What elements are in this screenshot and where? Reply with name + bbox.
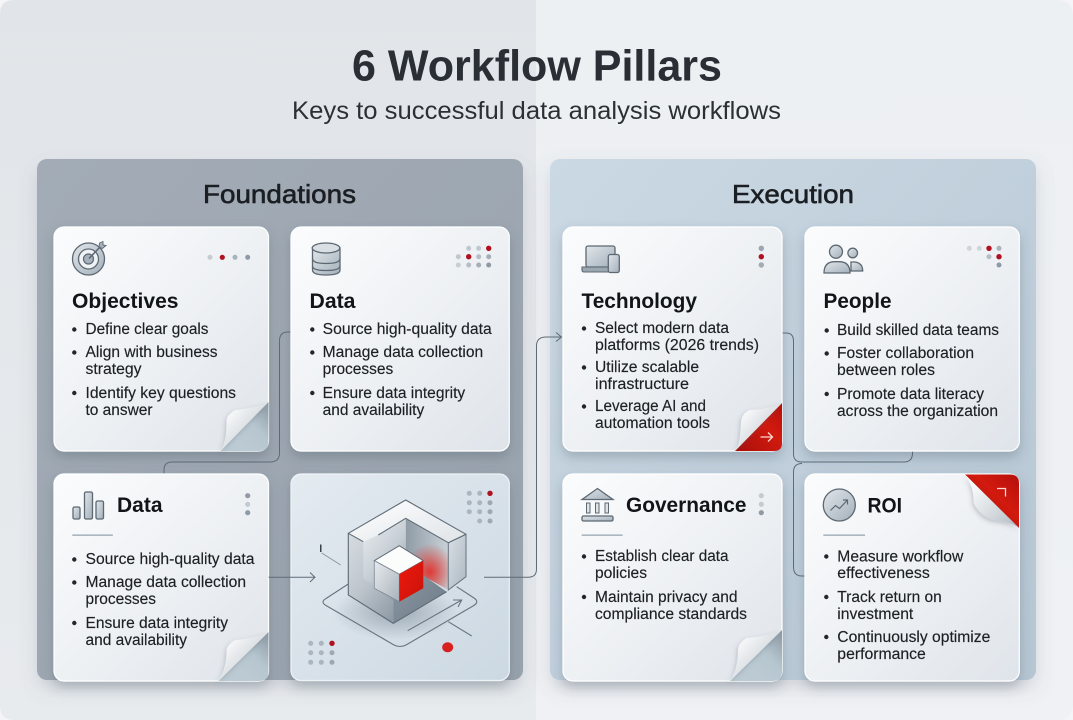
bullet list: Track return on [837, 589, 942, 606]
card: ROI [805, 474, 1019, 681]
dots decoration [456, 246, 491, 268]
bullet list: effectiveness [837, 565, 930, 582]
bullet list [824, 548, 990, 663]
red page curl with corner mark [965, 474, 1019, 528]
card: 3D cube illustration [291, 474, 509, 680]
icon: laptop and phone [582, 246, 619, 272]
bullet list: Ensure data integrity [86, 615, 228, 632]
heading: Objectives: Objectives [72, 290, 178, 313]
bullet list: compliance standards [595, 606, 747, 623]
bullet list: Source high-quality data [86, 551, 255, 568]
icon: institution [582, 488, 613, 521]
heading: Execution: Execution [732, 179, 854, 209]
icon: database [312, 243, 340, 275]
card: Data [291, 227, 509, 451]
bullet list [824, 322, 999, 420]
bullet list: Promote data literacy [837, 386, 984, 403]
card: Technology [563, 227, 782, 451]
bullet list: Source high-quality data [323, 321, 492, 338]
dots decoration [245, 493, 250, 515]
bullet list: Identify key questions [86, 385, 236, 402]
heading: People: People [824, 290, 892, 313]
bullet list: Manage data collection [323, 344, 483, 361]
bullet list [310, 321, 492, 419]
bullet list: performance [837, 646, 926, 663]
heading: Technology: Technology [582, 290, 697, 313]
bullet list: processes [86, 591, 156, 608]
heading: Data: Data [310, 290, 356, 313]
bullet list: between roles [837, 362, 935, 379]
dots decoration [759, 246, 764, 268]
connector: to ROI [794, 464, 805, 576]
bullet list: processes [323, 361, 394, 378]
bullet list: Build skilled data teams [837, 322, 999, 339]
icon: isometric cube [320, 500, 477, 652]
bullet list: and availability [86, 632, 187, 649]
dots decoration [759, 493, 764, 515]
heading: Foundations: Foundations [203, 179, 356, 209]
bullet list: Utilize scalable [595, 359, 699, 376]
icon: growth chart circle [823, 489, 855, 521]
bullet list [582, 548, 747, 623]
bullet list: Establish clear data [595, 548, 729, 565]
bullet list: automation tools [595, 415, 710, 432]
bullet list [72, 321, 236, 419]
bullet list: Align with business [86, 344, 218, 361]
bullet list: Define clear goals [86, 321, 209, 338]
connector: Technology to People and Governance [782, 333, 912, 462]
bullet list: across the organization [837, 403, 998, 420]
divider [582, 534, 623, 536]
bullet list: and availability [323, 402, 425, 419]
divider [72, 534, 113, 536]
bullet list: to answer [86, 402, 152, 419]
card: People [805, 227, 1019, 451]
card: Governance [563, 474, 782, 681]
page curl [730, 630, 782, 681]
arrow: cube to Technology [484, 332, 562, 577]
icon: target [72, 242, 106, 275]
heading: ROI: ROI [868, 494, 902, 518]
arrow: lower Data card into cube [268, 572, 315, 582]
icon: people [824, 245, 863, 273]
page curl [218, 632, 268, 681]
bullet list: strategy [86, 361, 142, 378]
bullet list: infrastructure [595, 376, 689, 393]
dots decoration [967, 246, 1002, 268]
bullet list: Continuously optimize [837, 629, 990, 646]
bullet list: Leverage AI and [595, 398, 706, 415]
bullet list: Measure workflow [837, 548, 964, 566]
bullet list: Manage data collection [86, 574, 246, 591]
page curl [220, 402, 268, 451]
card: Objectives [54, 227, 268, 451]
bullet list: Select modern data [595, 320, 729, 337]
icon: bar chart [73, 492, 104, 519]
divider [823, 534, 865, 536]
heading: Governance: Governance [626, 494, 746, 517]
bullet list: platforms (2026 trends) [595, 337, 759, 354]
subtitle: Keys to successful data analysis workflows [292, 97, 781, 125]
bullet list: Ensure data integrity [323, 385, 466, 402]
dots top right [467, 491, 493, 524]
dots decoration [208, 255, 250, 260]
heading: Data: Data [117, 494, 163, 517]
bullet list [72, 551, 255, 649]
title: 6 Workflow Pillars [352, 42, 722, 90]
bullet list: Maintain privacy and [595, 589, 738, 606]
card: Data (lower) [54, 474, 268, 681]
connector: Data to lower Data card [164, 332, 291, 474]
bullet list: investment [837, 606, 914, 623]
bullet list [582, 320, 759, 432]
bullet list: policies [595, 565, 647, 582]
red page curl with arrow [735, 403, 782, 451]
bullet list: Foster collaboration [837, 345, 974, 362]
dots bottom left [308, 641, 335, 665]
